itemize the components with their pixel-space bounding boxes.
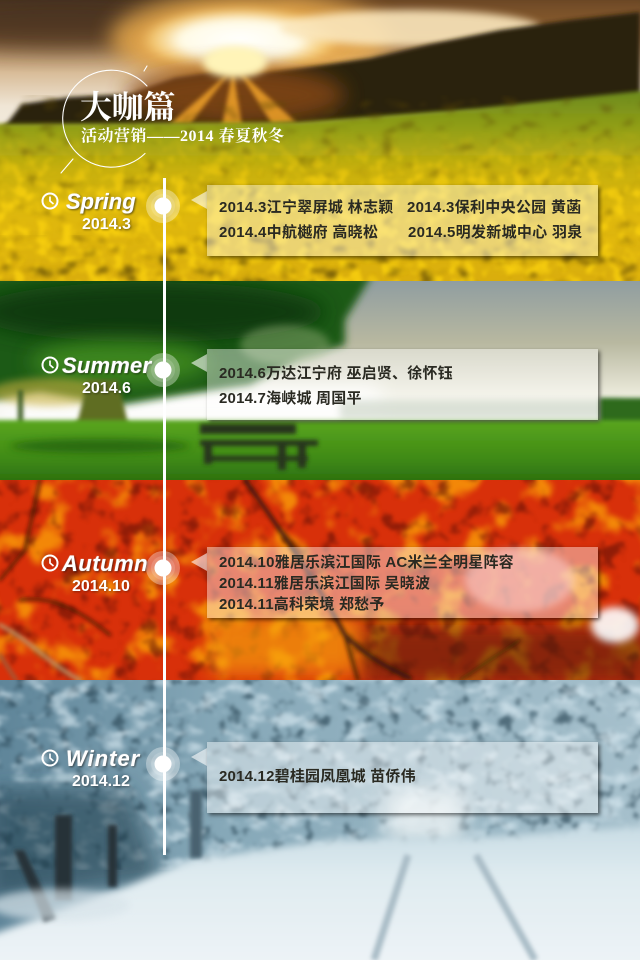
season name: Summer — [62, 353, 151, 378]
emblem circle ring — [60, 65, 148, 174]
event line: 2014.12碧桂园凤凰城 苗侨伟 — [219, 768, 416, 785]
season date: 2014.3 — [82, 216, 131, 233]
pointer — [191, 748, 207, 766]
event line: 2014.3江宁翠屏城 林志颖 — [219, 199, 394, 216]
callout — [207, 742, 598, 813]
main title: 大咖篇 — [80, 89, 175, 125]
season date: 2014.12 — [72, 773, 130, 790]
icon: clock — [42, 750, 58, 766]
callout — [207, 349, 598, 420]
event line: 2014.11雅居乐滨江国际 吴晓波 — [219, 575, 430, 592]
season date: 2014.6 — [82, 380, 131, 397]
timeline marker — [146, 551, 180, 585]
pointer — [191, 354, 207, 372]
timeline axis — [163, 178, 166, 855]
pointer — [191, 191, 207, 209]
callout — [207, 547, 598, 618]
season name: Winter — [66, 746, 140, 771]
callout — [207, 185, 598, 256]
timeline marker — [146, 189, 180, 223]
event line: 2014.10雅居乐滨江国际 AC米兰全明星阵容 — [219, 554, 514, 571]
panel: spring — [42, 184, 603, 261]
icon: clock — [42, 554, 58, 572]
icon: clock — [42, 192, 58, 210]
panel: winter — [42, 741, 603, 818]
event line: 2014.7海峡城 周国平 — [219, 390, 362, 407]
event line: 2014.6万达江宁府 巫启贤、徐怀钰 — [219, 365, 453, 382]
season name: Autumn — [62, 551, 148, 576]
season date: 2014.10 — [72, 578, 130, 595]
event line: 2014.5明发新城中心 羽泉 — [408, 224, 583, 241]
season name: Spring — [66, 189, 136, 214]
timeline marker — [146, 747, 180, 781]
timeline marker — [146, 353, 180, 387]
event line: 2014.11高科荣境 郑愁予 — [219, 596, 385, 613]
panel: autumn — [42, 546, 603, 623]
event line: 2014.3保利中央公园 黄菡 — [407, 199, 582, 216]
event line: 2014.4中航樾府 高晓松 — [219, 224, 378, 241]
panel: summer — [42, 348, 603, 425]
title emblem — [60, 65, 285, 174]
subtitle: 活动营销——2014 春夏秋冬 — [81, 128, 285, 145]
pointer — [191, 553, 207, 571]
icon: clock — [42, 356, 58, 374]
